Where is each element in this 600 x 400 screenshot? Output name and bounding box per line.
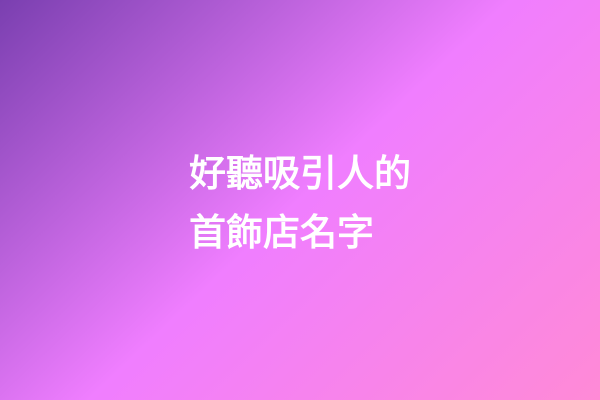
title: 首飾店名字 bbox=[189, 212, 374, 253]
title: 好聽吸引人的 bbox=[189, 153, 411, 194]
title bbox=[189, 153, 411, 253]
